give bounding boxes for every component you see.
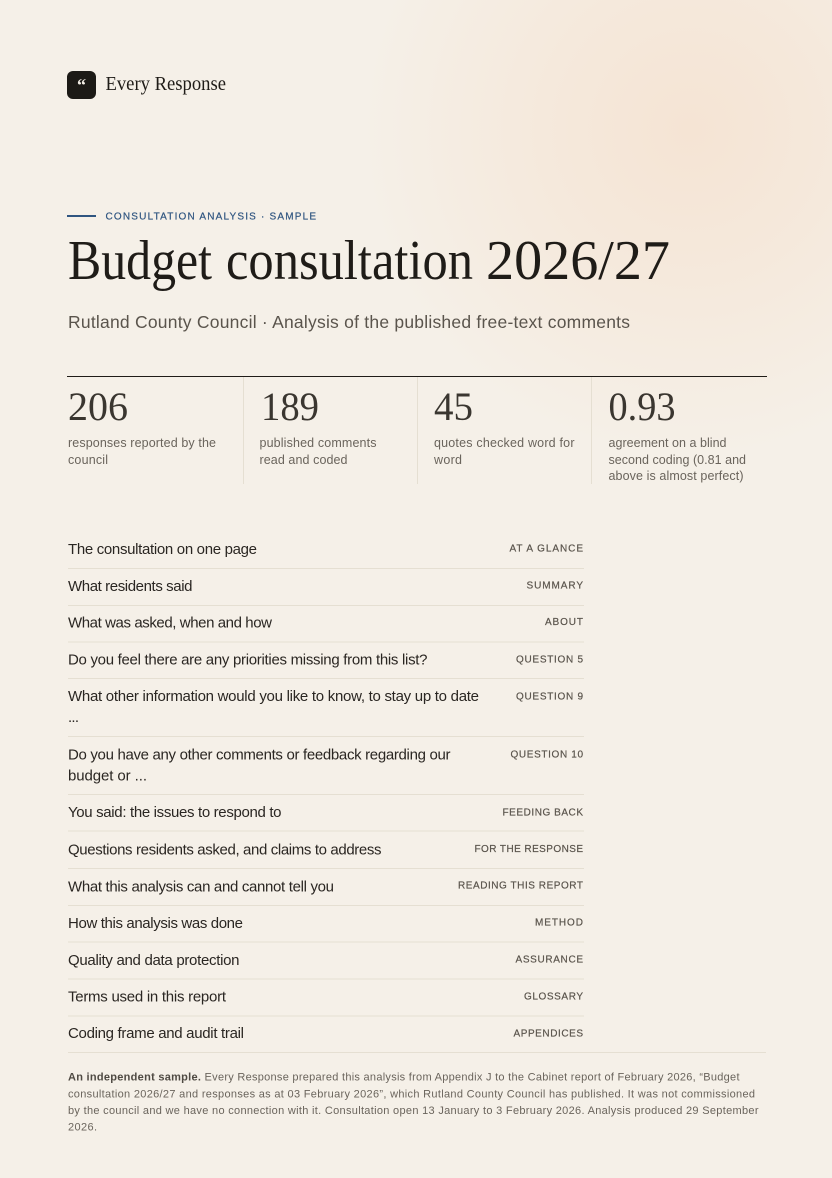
row: at a glance	[68, 541, 583, 558]
row: assurance: ASSURANCE	[516, 954, 583, 966]
row: about	[68, 614, 583, 632]
row: reading this report: READING THIS REPORT	[458, 880, 583, 892]
row: method: How this analysis was done	[68, 915, 243, 932]
row: question 9: What other information would you like to know, to stay up to date	[68, 688, 479, 705]
row: glossary: Terms used in this report	[68, 988, 227, 1006]
stat: quotes	[433, 384, 574, 467]
title: 2026/27	[486, 230, 670, 292]
stat: agreement: agreement on a blind	[608, 436, 727, 450]
stat: agreement: 0.93	[608, 384, 676, 429]
stat: agreement: above is almost perfect)	[608, 469, 744, 483]
row: question 9	[68, 688, 583, 726]
footnote: by the council and we have no connection with it. Consultation open 13 January to 3 February 2026. Analysis produced 29 September	[68, 1105, 759, 1117]
row: question 5	[68, 652, 583, 668]
row: glossary: GLOSSARY	[524, 992, 583, 1002]
stat: quotes: 45	[434, 384, 473, 429]
contents list	[68, 541, 766, 1052]
title: Budget	[68, 230, 212, 292]
stat: comments	[260, 384, 376, 467]
stat: agreement: second coding (0.81 and	[608, 453, 746, 467]
stat: responses: 206	[68, 384, 128, 429]
row: assurance: Quality and data protection	[68, 952, 240, 969]
row: summary: What residents said	[68, 578, 192, 595]
row: method	[68, 915, 583, 932]
row: reading this report: What this analysis can and cannot tell you	[68, 878, 334, 896]
row: feeding back	[68, 804, 583, 821]
row: at a glance: AT A GLANCE	[510, 544, 583, 554]
row: for the response: FOR THE RESPONSE	[474, 844, 583, 855]
row: question 9: QUESTION 9	[516, 692, 583, 702]
footnote: 2026.	[68, 1122, 97, 1134]
row: feeding back: FEEDING BACK	[502, 808, 583, 818]
stats row	[67, 376, 767, 484]
row: glossary	[68, 988, 583, 1006]
icon: quote mark	[67, 71, 96, 99]
row: appendices: APPENDICES	[514, 1028, 583, 1040]
row: question 5: QUESTION 5	[516, 654, 583, 666]
brand name: Every Response	[106, 74, 226, 95]
logo	[67, 71, 226, 99]
eyebrow: CONSULTATION ANALYSIS · SAMPLE	[106, 212, 316, 222]
footnote: An independent sample. Every Response prepared this analysis from Appendix J to the Cabinet report of February 2026, “Budget	[68, 1072, 740, 1084]
row: about: What was asked, when and how	[68, 614, 272, 632]
footnote: consultation 2026/27 and responses as at 03 February 2026”, which Rutland County Council has published. It was not commissioned	[68, 1088, 755, 1100]
row: for the response	[68, 842, 583, 858]
row: appendices: Coding frame and audit trail	[68, 1025, 244, 1042]
row: reading this report	[68, 878, 583, 896]
title: consultation	[226, 230, 473, 292]
stat: quotes: word	[433, 453, 462, 467]
title	[68, 230, 670, 292]
row: for the response: Questions residents asked, and claims to address	[68, 842, 382, 858]
footnote	[68, 1072, 759, 1134]
row: question 10: Do you have any other comments or feedback regarding our	[68, 746, 450, 764]
row: method: METHOD	[535, 918, 583, 928]
stat: responses: responses reported by the	[68, 436, 216, 450]
stat: quotes: quotes checked word for	[434, 436, 574, 450]
row: question 9: ...	[68, 709, 79, 726]
stat: comments: published comments	[260, 436, 376, 450]
icon: quote mark: “	[77, 75, 86, 95]
row: assurance	[68, 952, 583, 969]
row: feeding back: You said: the issues to respond to	[68, 804, 282, 821]
row: question 10: QUESTION 10	[510, 750, 583, 760]
row: summary: SUMMARY	[526, 580, 583, 592]
stat: comments: read and coded	[260, 453, 348, 467]
row: at a glance: The consultation on one page	[68, 541, 257, 558]
stat: responses	[68, 384, 216, 467]
row: question 10: budget or ...	[68, 768, 147, 784]
row: about: ABOUT	[545, 617, 583, 628]
row: summary	[68, 578, 583, 595]
row: question 10	[68, 746, 583, 784]
row: appendices	[68, 1025, 583, 1042]
row: question 5: Do you feel there are any priorities missing from this list?	[68, 652, 428, 668]
stat: comments: 189	[261, 384, 319, 429]
stat: responses: council	[68, 453, 108, 467]
stat: agreement	[608, 384, 746, 483]
subtitle: Rutland County Council · Analysis of the published free-text comments	[68, 312, 630, 332]
